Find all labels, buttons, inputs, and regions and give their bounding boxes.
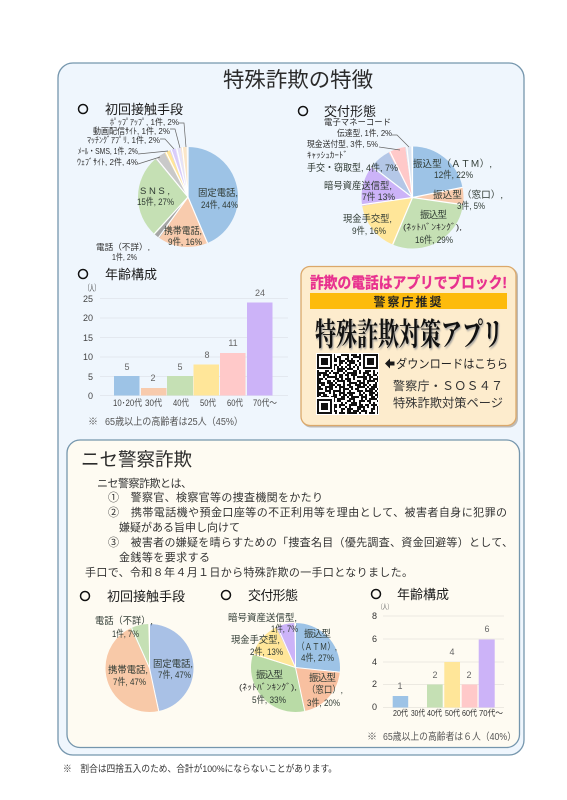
pie chart: delivery form 2: 暗号資産送信型,: [228, 612, 297, 624]
bar chart: age composition 2: （人）: [378, 603, 392, 611]
pie chart: delivery form 2: 3件, 20%: [307, 697, 340, 709]
note: elderly share: ※: [88, 417, 98, 428]
pie chart: delivery form: 手交・窃取型, 4件, 7%: [307, 162, 399, 174]
heading: age composition: 年齢構成: [105, 267, 157, 282]
pie chart: delivery form: 3件, 5%: [457, 200, 485, 212]
pie chart: first contact 2: 電話（不詳）,: [95, 615, 153, 627]
bar chart: age composition 2: 2: [372, 679, 377, 689]
pie chart: first contact: 動画配信ｻｲﾄ, 1件, 2%: [93, 126, 170, 136]
bar chart: age composition 2: 2: [466, 670, 472, 680]
bar chart: age composition 2: 1: [397, 681, 403, 691]
pie chart: first contact 2: 固定電話,: [153, 659, 193, 670]
pie chart: delivery form 2: （ＡＴＭ）,: [297, 641, 337, 653]
description text: 金銭等を要求する: [119, 550, 210, 564]
pie chart: first contact: [77, 117, 238, 262]
bar chart: age composition: 50代: [200, 398, 216, 408]
description text: ③ 被害者の嫌疑を晴らすための「捜査名目（優先調査、資金回避等）として、: [108, 535, 513, 549]
bar chart: age composition: 11: [228, 338, 238, 348]
bar chart: age composition: [83, 283, 288, 408]
recommendation banner: 警察庁推奨: [373, 294, 444, 309]
bar chart: age composition 2: [372, 603, 504, 718]
pie chart: delivery form: 7件 13%: [362, 191, 396, 203]
pie chart: delivery form 2: 2件, 13%: [250, 646, 283, 658]
heading: age composition 2: [372, 587, 449, 602]
page name: [393, 378, 503, 410]
heading: fake police fraud: ニセ警察詐欺: [81, 449, 192, 470]
icon: arrow: [385, 358, 394, 368]
note: elderly share 2: [367, 730, 516, 743]
bar chart: age composition: 15: [83, 333, 93, 343]
pie chart: first contact 2: [95, 615, 193, 711]
bar chart: age composition 2: 8: [372, 611, 377, 621]
bar chart: age composition: 10･20代: [113, 398, 142, 408]
page name: 警察庁・ＳＯＳ４７: [393, 378, 503, 393]
bar chart: age composition: 60代: [227, 398, 243, 408]
pie chart: first contact: 24件, 44%: [201, 199, 238, 211]
heading: age composition 2: 年齢構成: [397, 587, 449, 602]
pie chart: first contact 2: 1件, 7%: [112, 628, 139, 640]
pie chart: first contact: 電話（不詳）,: [96, 242, 150, 252]
pie chart: delivery form: 9件, 16%: [352, 225, 386, 237]
bar chart: age composition 2: 30代: [411, 708, 425, 718]
bar chart: age composition: 40代: [173, 398, 189, 408]
pie chart: delivery form: 現金手交型,: [343, 213, 392, 225]
note: elderly share 2: 65歳以上の高齢者は６人（40%）: [383, 730, 516, 743]
pie chart: first contact: ﾏｯﾁﾝｸﾞｱﾌﾟﾘ, 1件, 2%: [87, 135, 160, 145]
bar chart: age composition: 8: [204, 350, 210, 360]
heading: delivery form 2: [222, 588, 298, 603]
pie chart: first contact: 1件, 2%: [112, 252, 137, 262]
pie chart: delivery form: 伝達型, 1件, 2%: [337, 128, 392, 138]
panel: special fraud characteristics: [58, 63, 524, 755]
pie chart: delivery form: 振込型（窓口）,: [433, 189, 503, 201]
panel: app promotion: [301, 266, 518, 428]
bar chart: age composition: （人）: [85, 283, 99, 293]
heading: age composition: [78, 267, 157, 282]
pie chart: delivery form: (ﾈｯﾄﾊﾞﾝｷﾝｸﾞ),: [403, 222, 462, 232]
bar chart: age composition: 5: [88, 372, 93, 382]
description text: 手口で、令和８年４月１日から特殊詐欺の一手口となりました。: [85, 565, 413, 579]
heading: delivery form: 交付形態: [324, 104, 376, 119]
recommendation banner: [310, 293, 507, 309]
bar chart: age composition 2: 2: [432, 670, 438, 680]
pie chart: first contact: ﾒｰﾙ・SMS, 1件, 2%: [78, 146, 138, 156]
panel: fake police fraud: [67, 440, 520, 748]
pie chart: delivery form 2: 振込型: [309, 672, 336, 684]
QR code: [316, 353, 379, 415]
pie chart: first contact: ｳｪﾌﾞｻｲﾄ, 2件, 4%: [77, 157, 138, 167]
heading: delivery form 2: 交付形態: [248, 588, 298, 603]
pie chart: delivery form: 現金送付型, 3件, 5%: [307, 139, 378, 149]
pie chart: first contact 2: 携帯電話,: [108, 664, 148, 676]
pie chart: delivery form: 暗号資産送信型,: [324, 180, 392, 192]
footnote: ※ 割合は四捨五入のため、合計が100%にならないことがあります。: [63, 763, 337, 775]
pie chart: delivery form 2: (ﾈｯﾄﾊﾞﾝｷﾝｸﾞ),: [239, 682, 297, 692]
bar chart: age composition 2: 70代～: [479, 708, 503, 718]
bar chart: age composition: 10: [83, 352, 93, 362]
bar chart: age composition 2: 40代: [427, 708, 442, 718]
pie chart: delivery form 2: 1件, 7%: [271, 623, 298, 635]
page name: 特殊詐欺対策ページ: [393, 395, 503, 410]
pie chart: first contact 2: 7件, 47%: [158, 669, 191, 681]
bar chart: age composition: 2: [150, 373, 156, 383]
bar chart: age composition: 24: [255, 288, 265, 298]
download text: ダウンロードはこちら: [396, 356, 508, 371]
app name: 特殊詐欺対策アプリ: [315, 317, 503, 352]
pie chart: first contact 2: 7件, 47%: [113, 676, 146, 688]
pie chart: first contact: SNS,: [140, 186, 170, 197]
description text: 嫌疑がある旨申し向けて: [119, 520, 240, 534]
pie chart: first contact: 携帯電話,: [164, 225, 202, 237]
pie chart: delivery form: 16件, 29%: [415, 234, 453, 246]
bar chart: age composition 2: 6: [372, 634, 377, 644]
title: 特殊詐欺の特徴: [223, 69, 373, 92]
bar chart: age composition: 25: [83, 294, 93, 304]
pie chart: delivery form: 電子マネーコード: [324, 117, 391, 127]
pie chart: delivery form: 振込型（ＡＴＭ）,: [413, 158, 492, 170]
pie chart: first contact: 9件, 16%: [168, 236, 202, 248]
bar chart: age composition: 20: [83, 313, 93, 323]
heading: delivery form: [298, 104, 376, 119]
pie chart: delivery form 2: 4件, 27%: [301, 652, 334, 664]
bar chart: age composition 2: 6: [484, 624, 490, 634]
description text: [85, 476, 513, 579]
bar chart: age composition 2: 4: [449, 647, 455, 657]
bar chart: age composition 2: 0: [372, 702, 377, 712]
bar chart: age composition 2: 60代: [462, 708, 477, 718]
pie chart: delivery form: 振込型: [420, 209, 447, 221]
bar chart: age composition 2: 20代: [393, 708, 408, 718]
bar chart: age composition: 5: [177, 362, 183, 372]
note: elderly share 2: ※: [367, 732, 377, 743]
description text: ① 警察官、検察官等の捜査機関をかたり: [108, 490, 323, 504]
heading: first contact 2: 初回接触手段: [107, 589, 185, 604]
pie chart: delivery form 2: 振込型: [256, 669, 283, 681]
bar chart: age composition: 30代: [145, 398, 162, 408]
pie chart: delivery form: ｷｬｯｼｭｶｰﾄﾞ: [307, 150, 348, 160]
bar chart: age composition 2: 50代: [445, 708, 460, 718]
heading: first contact: 初回接触手段: [105, 102, 183, 117]
note: elderly share: [88, 415, 243, 428]
pie chart: delivery form: 12件, 22%: [434, 169, 473, 181]
pie chart: first contact: ﾎﾟｯﾌﾟｱｯﾌﾟ, 1件, 2%: [110, 117, 179, 127]
pie chart: delivery form 2: 振込型: [304, 628, 331, 640]
bar chart: age composition 2: 4: [372, 657, 377, 667]
app headline: 詐欺の電話はアプリでブロック!: [310, 273, 507, 292]
pie chart: first contact: 固定電話,: [198, 188, 238, 199]
description text: ② 携帯電話機や預金口座等の不正利用等を理由として、被害者自身に犯罪の: [108, 505, 507, 519]
bar chart: age composition: 5: [124, 362, 130, 372]
pie chart: first contact: 15件, 27%: [137, 196, 174, 208]
pie chart: delivery form: [307, 117, 503, 246]
bar chart: age composition: 0: [88, 391, 93, 401]
note: elderly share: 65歳以上の高齢者は25人（45%）: [105, 415, 243, 428]
pie chart: delivery form 2: （窓口）,: [307, 684, 343, 696]
pie chart: delivery form 2: [228, 612, 343, 711]
pie chart: delivery form 2: 現金手交型,: [231, 634, 280, 646]
description text: ニセ警察詐欺とは、: [97, 476, 192, 490]
bar chart: age composition: 70代～: [253, 398, 277, 408]
pie chart: delivery form 2: 5件, 33%: [252, 694, 286, 706]
